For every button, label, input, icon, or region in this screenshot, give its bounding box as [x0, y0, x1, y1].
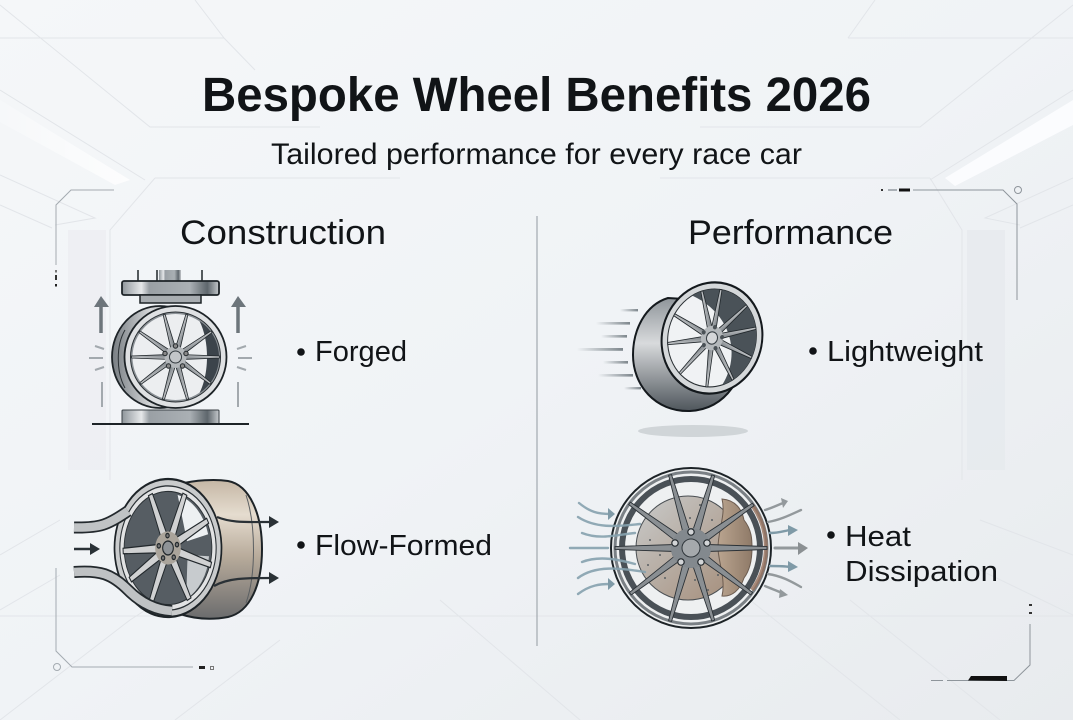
- icon: flow-formed wheel: [74, 475, 279, 621]
- center divider: [536, 216, 538, 646]
- subtitle: Tailored performance for every race car: [271, 138, 802, 171]
- label: heat dissipation: Dissipation: [845, 556, 998, 588]
- heading: construction: Construction: [180, 214, 386, 252]
- icon: forged wheel in press: [89, 270, 252, 424]
- panel: performance: [570, 214, 998, 628]
- decorative frame: left: [54, 190, 214, 670]
- panel: construction: [74, 214, 492, 621]
- label: forged: Forged: [315, 336, 407, 368]
- label: heat dissipation: [827, 521, 998, 588]
- icon: lightweight wheel: [577, 271, 775, 437]
- label: flow-formed: Flow-Formed: [315, 530, 492, 562]
- label: lightweight: Lightweight: [827, 336, 983, 368]
- heading: performance: Performance: [688, 214, 893, 252]
- decorative frame: right: [881, 186, 1032, 681]
- title: Bespoke Wheel Benefits 2026: [202, 69, 871, 122]
- label: heat dissipation: Heat: [845, 521, 911, 553]
- icon: heat dissipation wheel: [570, 468, 808, 628]
